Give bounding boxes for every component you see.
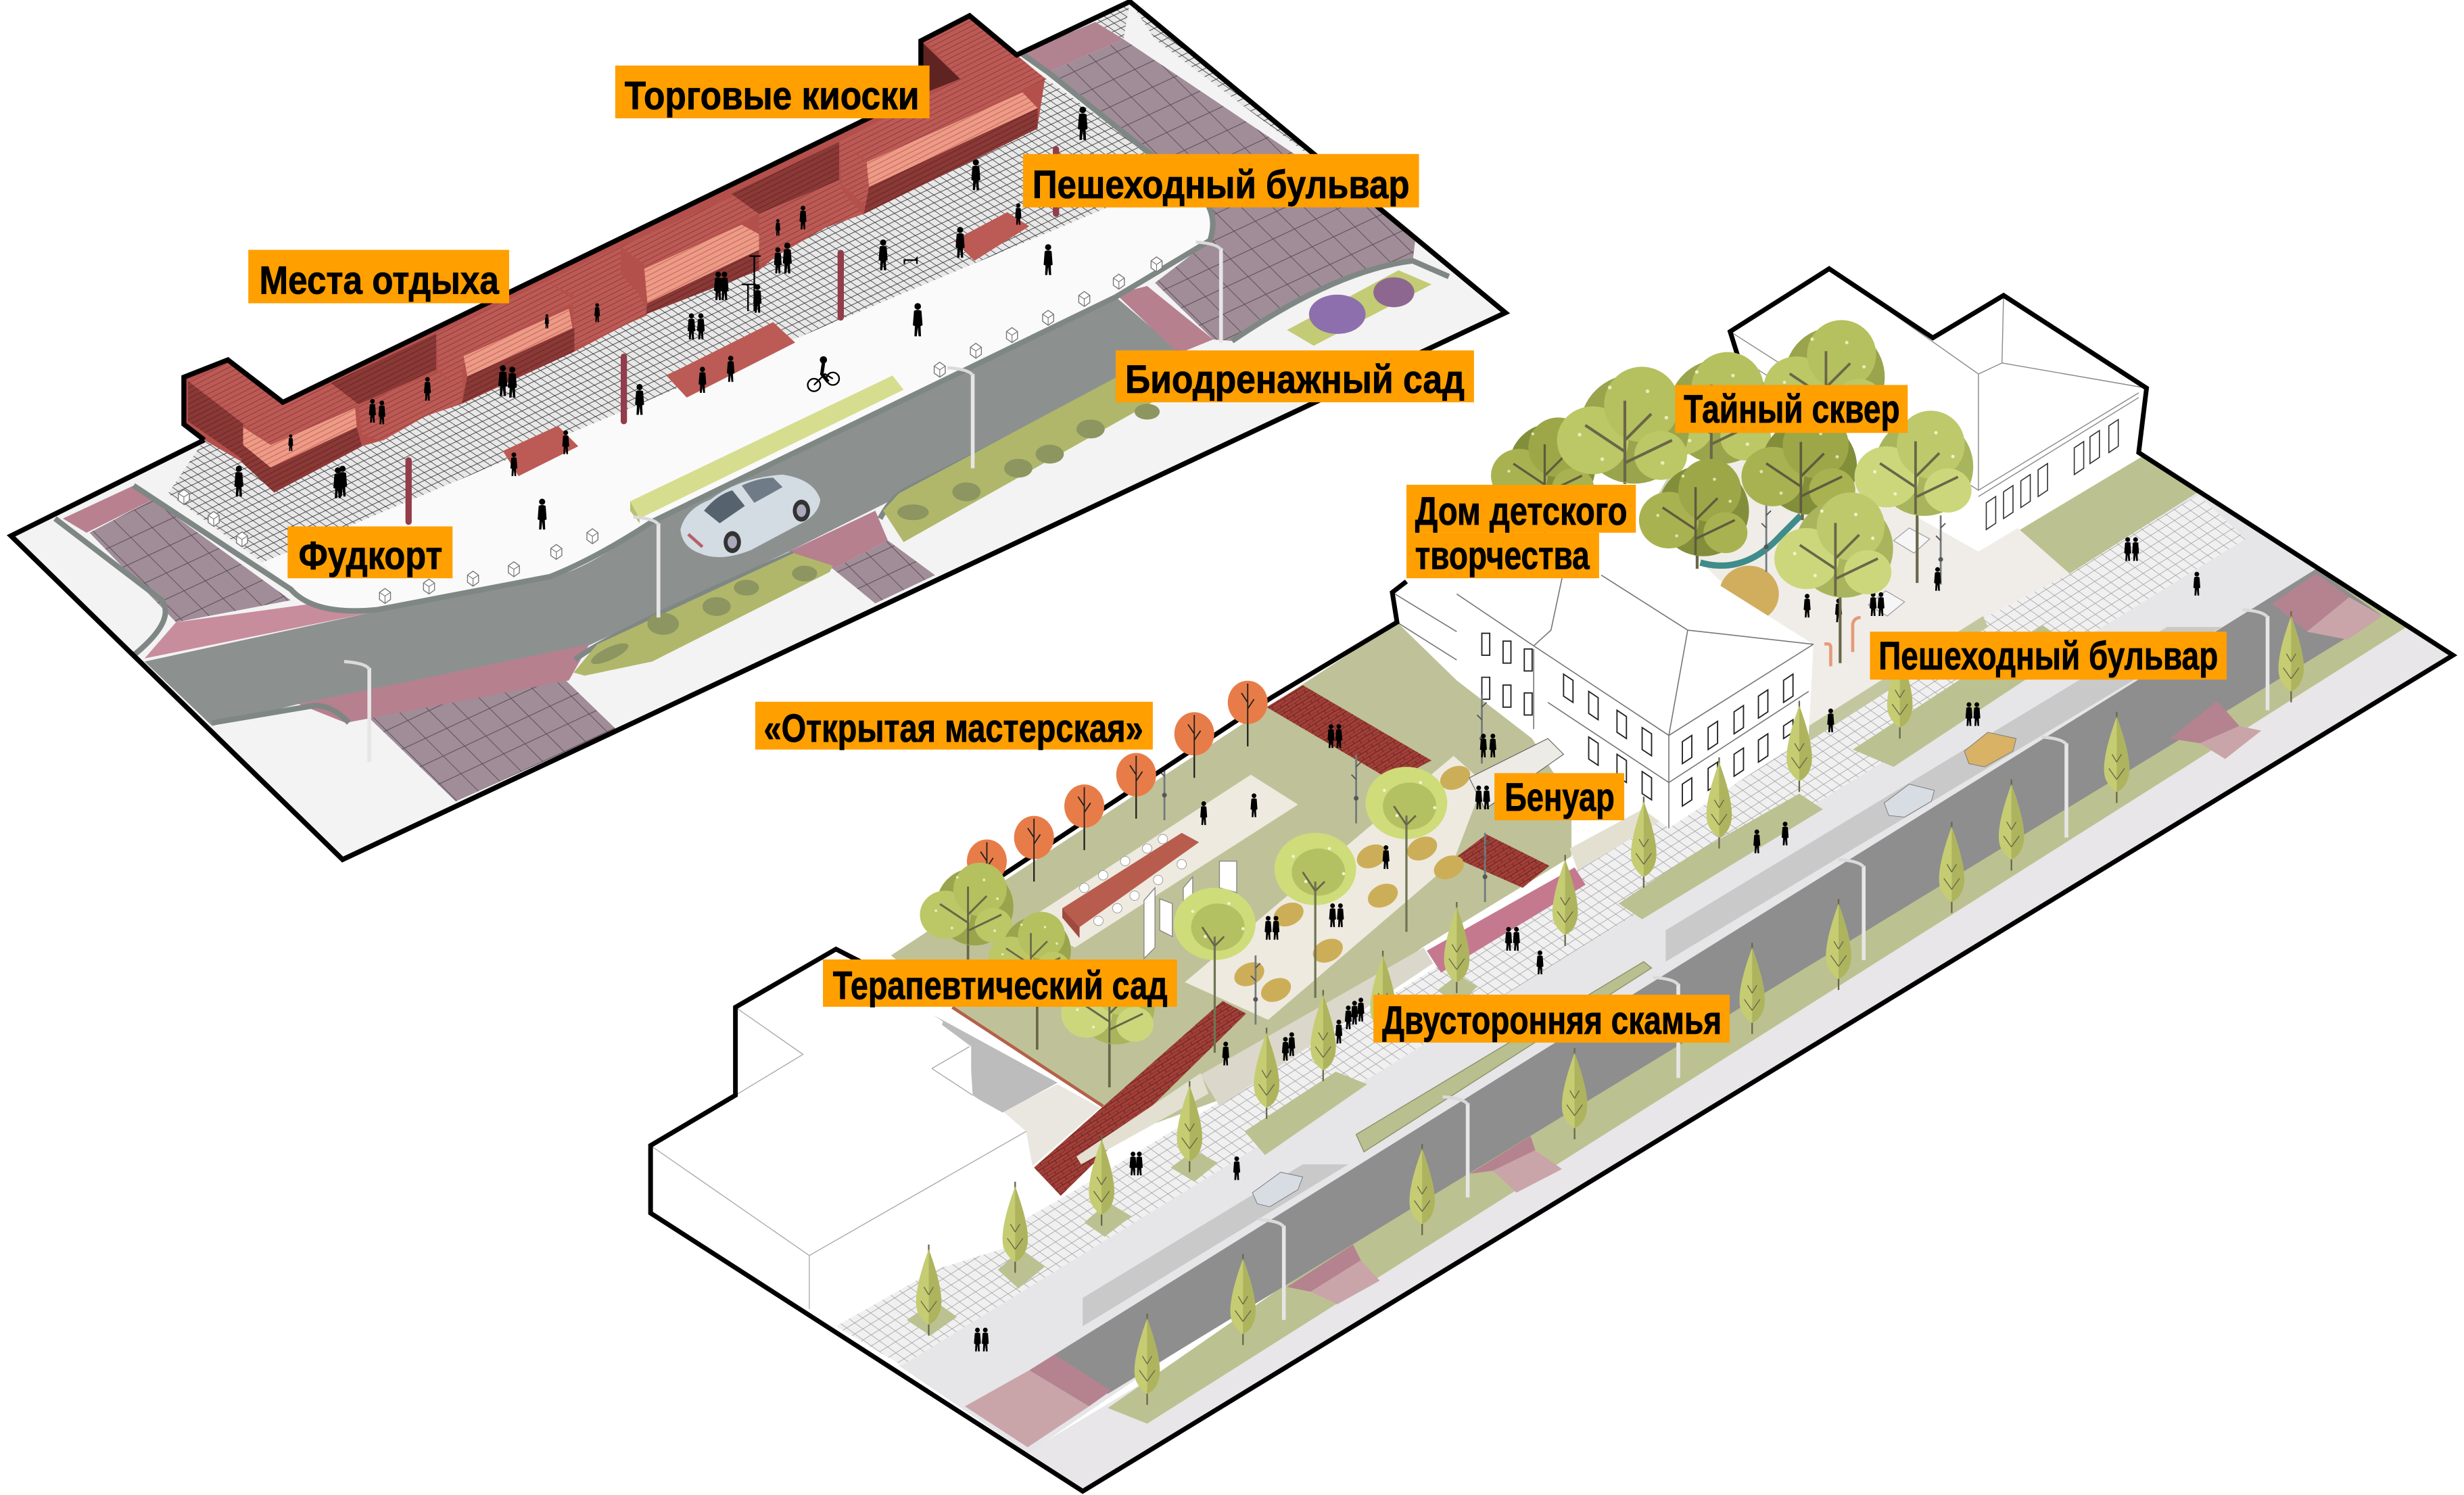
red poles — [408, 149, 1056, 522]
tile paving patches — [89, 0, 1422, 801]
lime bench — [630, 375, 903, 523]
far dark end — [920, 41, 960, 95]
main house — [1392, 533, 1814, 828]
courtyard plaza — [1639, 456, 2070, 726]
back building windows — [1986, 419, 2118, 529]
kiosk building — [184, 16, 1046, 492]
brick strips — [1034, 685, 1549, 1196]
outer green strip — [1108, 569, 2409, 1423]
back building — [1730, 268, 2147, 552]
street lamps — [344, 242, 1221, 762]
road — [145, 297, 1182, 726]
green lawns — [2018, 456, 2198, 573]
white promenade — [266, 208, 1106, 607]
lower-left white building — [650, 949, 1026, 1309]
brown lawn edge — [952, 1007, 1103, 1106]
lower plot outline — [650, 268, 2453, 1491]
entrance stairs — [1469, 738, 1563, 809]
inner light walkway — [899, 487, 2317, 1454]
kiosk base silhouette — [184, 16, 1045, 492]
hammock — [1701, 515, 1801, 565]
label: Терапевтический сад: Терапевтический сад — [833, 964, 1168, 1007]
cyclist — [808, 357, 839, 391]
label: Дом детского творчества — [1406, 485, 1636, 578]
panel: upper plot, food court boulevard — [0, 0, 1571, 880]
label: Открытая мастерская: «Открытая мастерская» — [763, 707, 1143, 751]
courtyard picnic tables — [1868, 528, 1930, 616]
white panels — [1144, 861, 1237, 959]
column trees, inner row — [916, 647, 1912, 1335]
courtyard grass patch — [1611, 471, 1713, 550]
kiosk light fronts — [243, 93, 1038, 468]
secret garden trees — [1491, 320, 1973, 663]
rain garden, lower — [573, 553, 833, 675]
cobbled sidewalk — [836, 495, 2246, 1366]
walkway lawn strips — [1853, 625, 2075, 767]
left end side face — [188, 381, 243, 460]
lower people silhouettes — [974, 538, 2200, 1352]
label: Дом детского творчества: Дом детского — [1415, 490, 1627, 533]
dark roofs — [331, 142, 839, 404]
lower street lamps — [1259, 610, 2267, 1320]
parking bays — [1083, 627, 2222, 1326]
roofs — [188, 19, 1046, 445]
ground sidewalk — [0, 0, 1571, 880]
garden round trees — [920, 767, 1447, 1087]
bollard cubes — [179, 257, 1162, 603]
road crossings over — [1116, 286, 1213, 354]
shrubs — [1231, 566, 1779, 1007]
lamp poles in the garden — [1160, 503, 1945, 1024]
label: Биодренажный сад: Биодренажный сад — [1125, 358, 1465, 402]
label: Двусторонняя скамья: Двусторонняя скамья — [1382, 999, 1722, 1043]
label: Пешеходный бульвар, upper: Пешеходный бульвар — [1033, 163, 1410, 207]
car — [680, 475, 820, 557]
ground — [629, 236, 2464, 1495]
road — [1054, 569, 2382, 1394]
outdoor benches — [503, 212, 1029, 476]
panel: lower plot, street and children's house — [629, 236, 2464, 1495]
central paved walk — [1185, 756, 1484, 1020]
label: Тайный сквер: Тайный сквер — [1684, 387, 1900, 431]
orange trees — [967, 681, 1268, 905]
outer sidewalk — [1028, 621, 2453, 1491]
pink crossings — [63, 22, 1124, 659]
label: Торговые киоски: Торговые киоски — [625, 74, 920, 118]
workshop long table — [1062, 833, 1199, 938]
green bench strip — [1356, 962, 1651, 1152]
workshop plaza — [1026, 775, 1298, 947]
column trees, outer row — [1135, 611, 2304, 1405]
pink road crossings — [965, 573, 2382, 1447]
tree planters — [907, 974, 1477, 1335]
house windows — [1482, 634, 1793, 806]
label: Дом детского творчества: творчества — [1415, 533, 1590, 577]
label: Пешеходный бульвар, lower: Пешеходный бульвар — [1878, 634, 2218, 678]
label: Бенуар: Бенуар — [1505, 776, 1615, 820]
people silhouettes — [235, 107, 1087, 529]
kiosk counters — [241, 108, 1038, 492]
label: Места отдыха: Места отдыха — [259, 259, 499, 303]
amphitheatre benches — [1076, 806, 1664, 1164]
orange pipe sculptures — [1824, 617, 1861, 666]
platforms — [358, 142, 869, 441]
gray wall — [916, 1005, 1058, 1112]
light paving by the wall — [1003, 1085, 1100, 1166]
kerbs — [55, 53, 1449, 723]
small cars — [1252, 732, 2016, 1207]
upper plot outline — [11, 1, 1505, 859]
courtyard green edge — [1809, 616, 1988, 742]
cobblestone plaza — [168, 72, 1155, 563]
rain garden, upper — [883, 377, 1160, 542]
label: Фудкорт: Фудкорт — [299, 533, 442, 577]
purple planting bed — [1287, 270, 1431, 346]
